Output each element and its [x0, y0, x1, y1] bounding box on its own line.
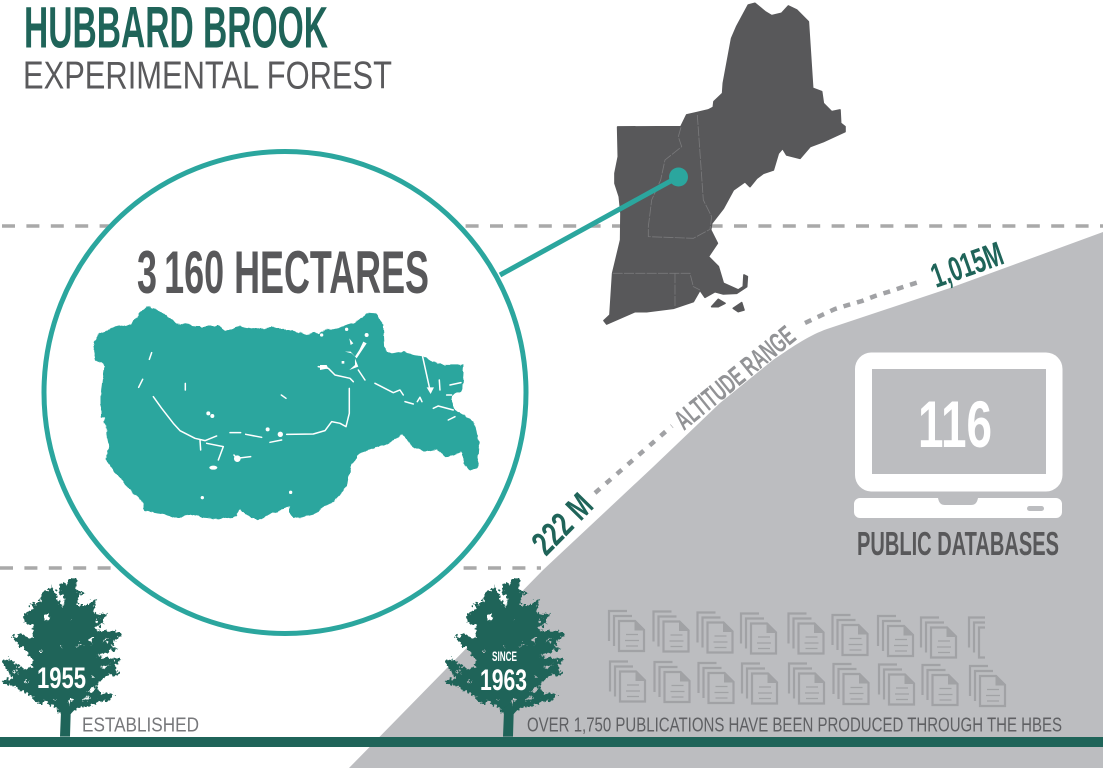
label 1,015M: 1,015M: [926, 235, 1008, 296]
icon: laptop: [854, 352, 1062, 518]
watershed circle: [44, 152, 526, 634]
label altitude range: ALTITUDE RANGE: [668, 320, 801, 436]
year 1955: 1955: [37, 662, 86, 695]
streams: [139, 353, 461, 460]
tree 1955: [2, 578, 122, 737]
established caption: ESTABLISHED: [82, 714, 199, 736]
tree 1963: [445, 578, 565, 737]
location map of New England: [604, 3, 845, 324]
database count: 116: [918, 387, 992, 461]
altitude dashes upper: [805, 282, 919, 323]
ponds: [201, 328, 434, 499]
hillside background: [349, 232, 1103, 768]
connector line and location dot: [500, 168, 688, 275]
dashed elevation guide lines: [0, 226, 1103, 568]
label 222 M: 222 M: [525, 486, 601, 563]
watershed shape: [93, 307, 478, 520]
subtitle: EXPERIMENTAL FOREST: [23, 54, 392, 98]
label since: SINCE: [492, 648, 517, 664]
ground bar: [0, 737, 1103, 747]
publications icon grid: [609, 611, 1005, 706]
altitude dashes lower: [595, 426, 672, 493]
hectares heading: 3 160 HECTARES: [137, 239, 429, 306]
year 1963: 1963: [480, 664, 527, 697]
